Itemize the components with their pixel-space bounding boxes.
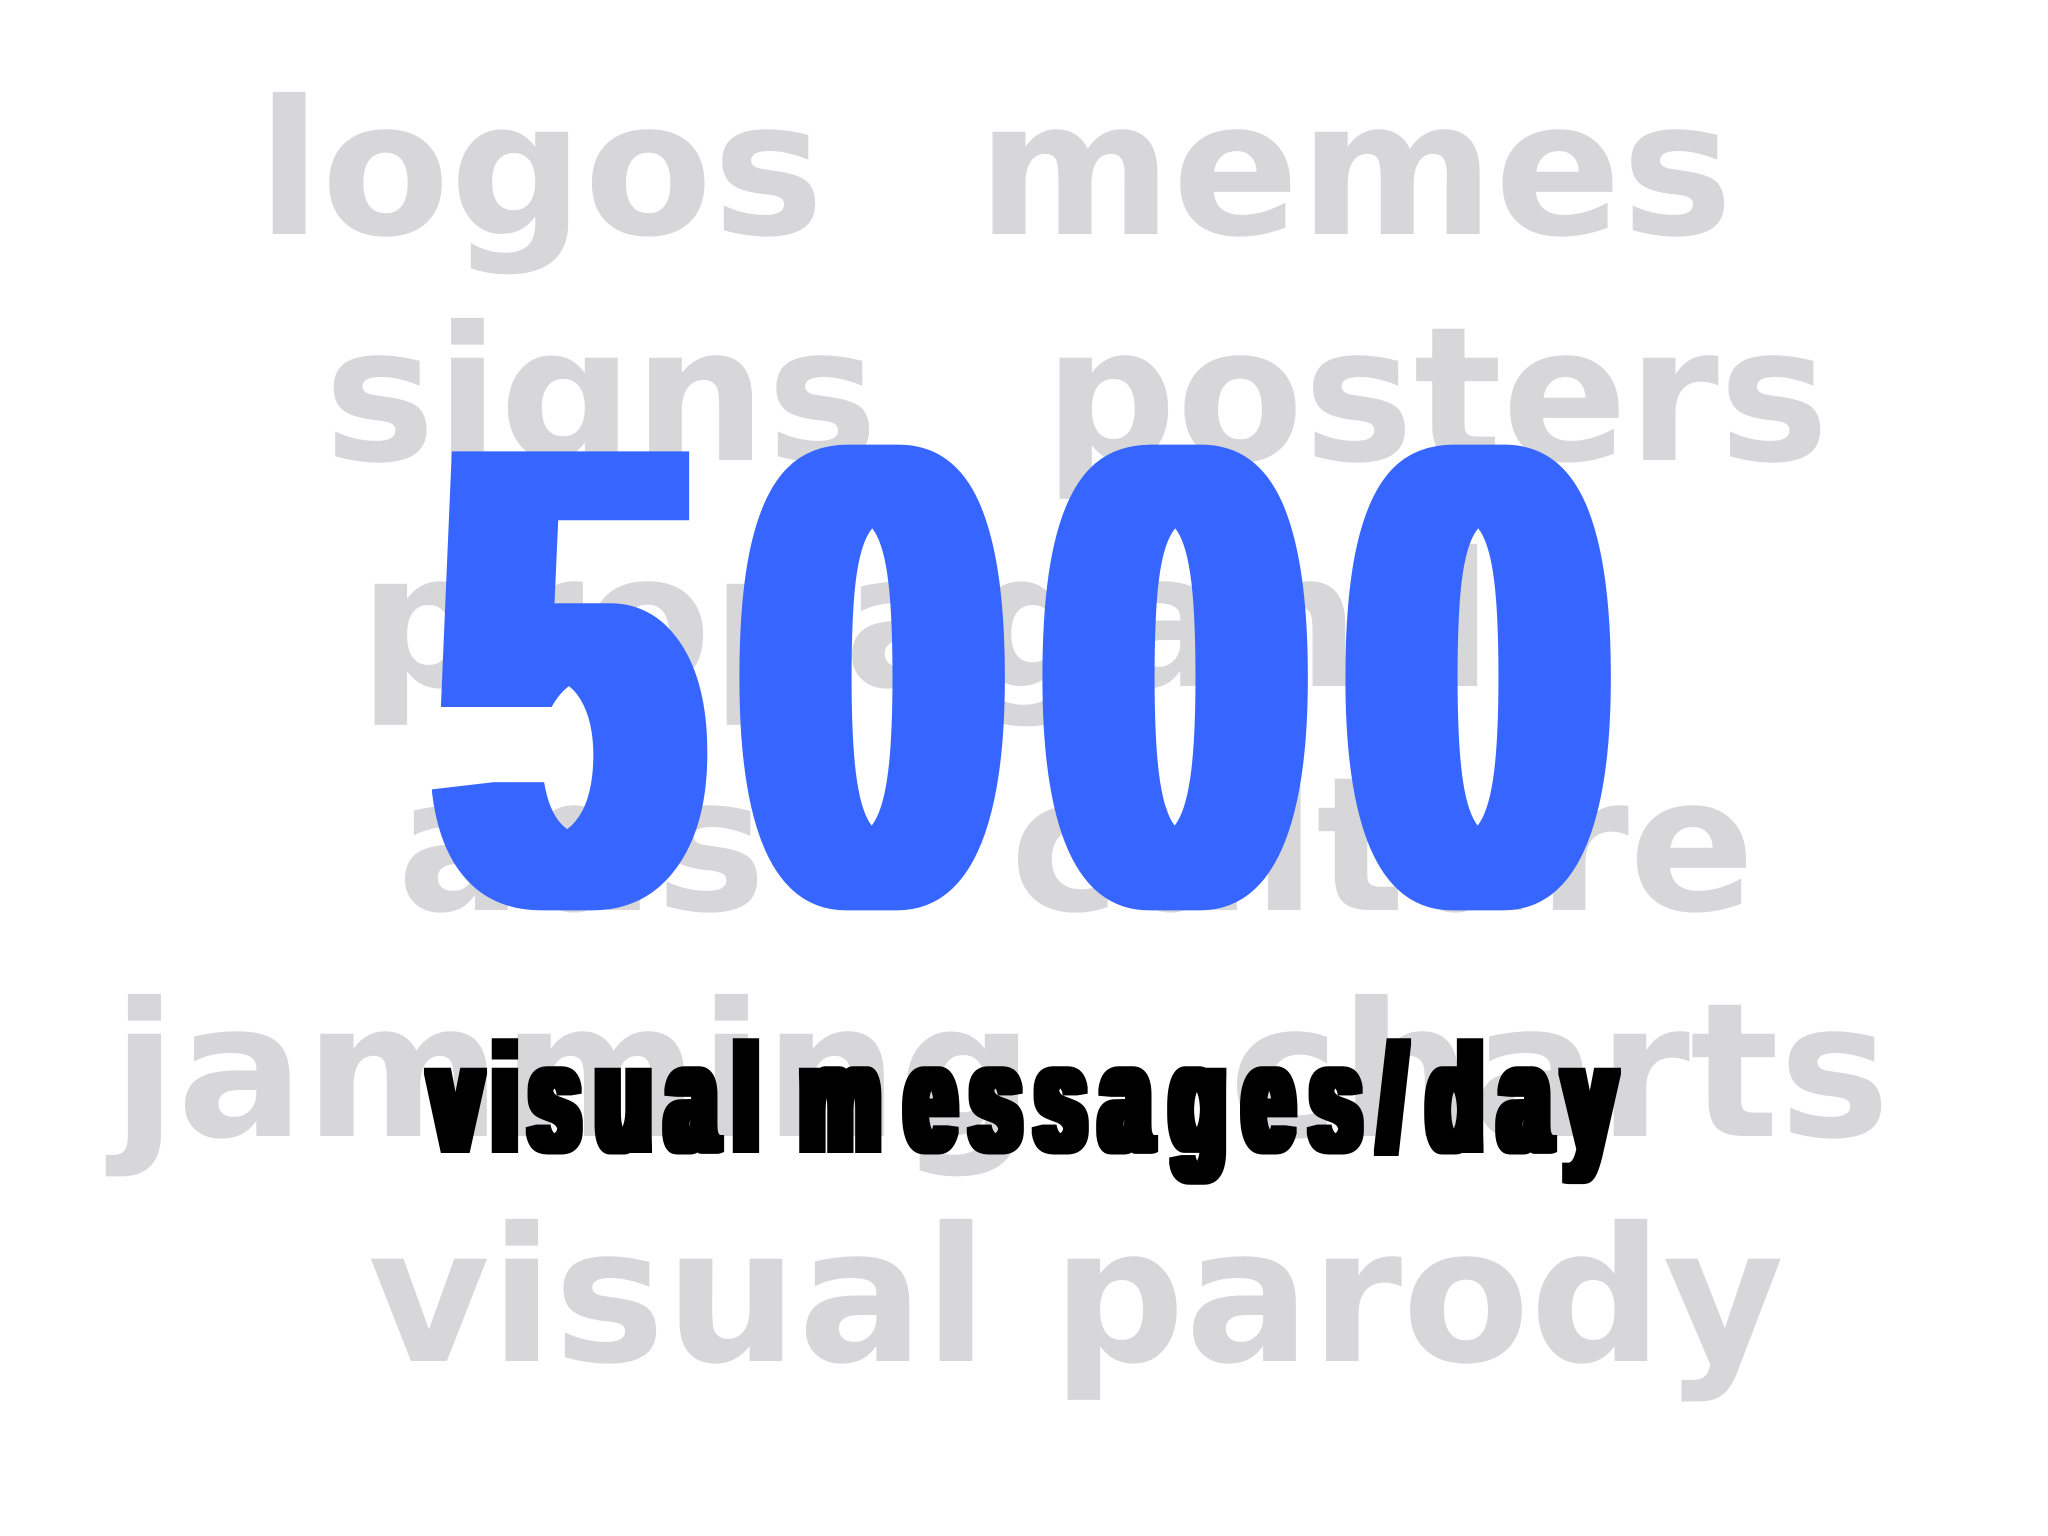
caption: visual messages/day: visual messages/day — [430, 1015, 1615, 1183]
word: culture: culture — [1010, 737, 1755, 955]
word: ads: ads — [397, 737, 766, 955]
word: posters: posters — [1044, 287, 1829, 505]
word: parody: parody — [1052, 1188, 1784, 1406]
word: signs: signs — [324, 287, 878, 505]
word: memes: memes — [977, 61, 1733, 279]
background word cloud — [105, 61, 1890, 1406]
word: visual: visual — [368, 1188, 988, 1406]
word: logos: logos — [257, 61, 824, 279]
word: charts: charts — [1229, 963, 1890, 1181]
word: jamming: jamming — [105, 963, 1034, 1181]
big number: 5000: 5000 — [443, 311, 1604, 1043]
word: propaganda: propaganda — [359, 513, 1618, 731]
